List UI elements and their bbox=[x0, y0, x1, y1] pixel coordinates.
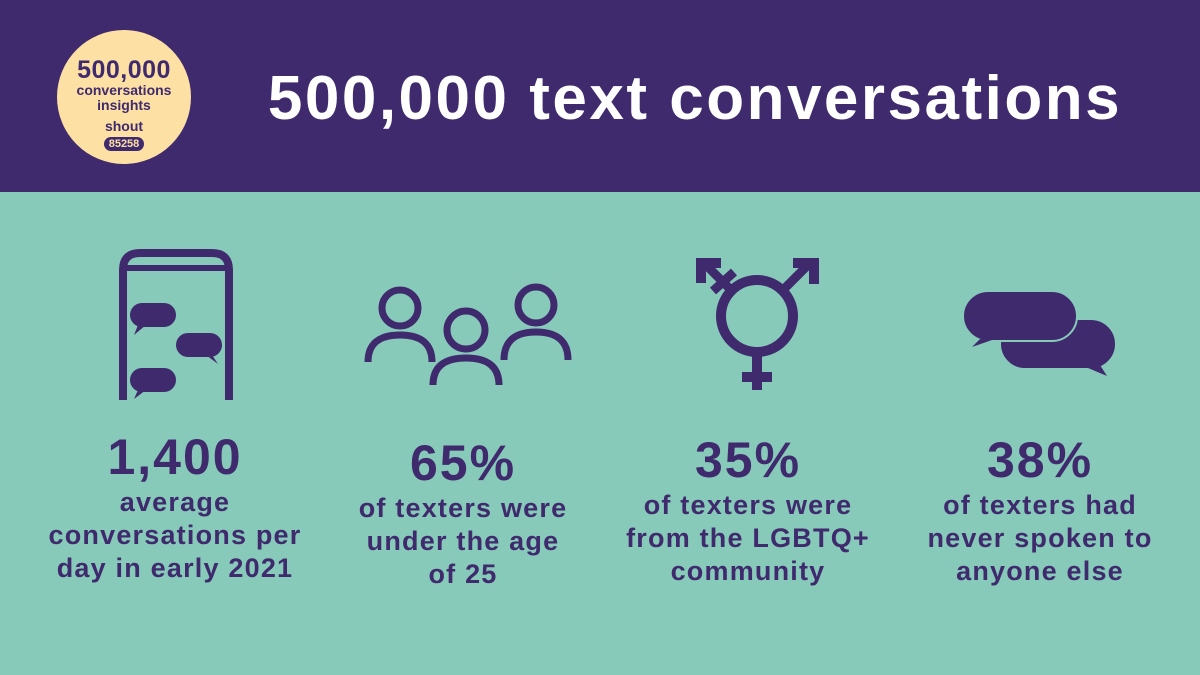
stat: LGBTQ+: from the LGBTQ+ bbox=[626, 523, 870, 553]
stat: under 25: of texters were bbox=[359, 493, 567, 523]
stat: never spoken bbox=[927, 432, 1153, 586]
icon: transgender symbol bbox=[696, 258, 819, 390]
stat: under 25: under the age bbox=[367, 526, 559, 556]
stat: under 25 bbox=[359, 435, 567, 589]
stat: never spoken: of texters had bbox=[943, 490, 1137, 520]
title: 500,000 text conversations bbox=[268, 64, 1122, 133]
stat: conversations per day bbox=[48, 429, 302, 583]
badge: shout logo: 85258 bbox=[109, 138, 139, 150]
header band bbox=[0, 0, 1200, 192]
icon: three people bbox=[364, 284, 572, 385]
badge: shout logo: 500,000 bbox=[77, 56, 171, 84]
stat: never spoken: never spoken to bbox=[927, 523, 1153, 553]
stat: LGBTQ+ bbox=[626, 432, 870, 586]
stat: conversations per day: average bbox=[120, 487, 230, 517]
icon: speech bubbles bbox=[964, 292, 1115, 376]
badge: shout logo bbox=[57, 30, 191, 164]
stat: conversations per day: 1,400 bbox=[107, 429, 243, 485]
stat: under 25: 65% bbox=[410, 435, 516, 491]
stat: never spoken: 38% bbox=[987, 432, 1093, 488]
stat: LGBTQ+: 35% bbox=[695, 432, 801, 488]
stat: conversations per day: day in early 2021 bbox=[57, 553, 293, 583]
stat: LGBTQ+: of texters were bbox=[644, 490, 852, 520]
badge: shout logo: insights bbox=[97, 97, 151, 113]
stat: never spoken: anyone else bbox=[956, 556, 1124, 586]
badge: shout logo: shout bbox=[105, 118, 143, 134]
stat: under 25: of 25 bbox=[428, 559, 498, 589]
stat: LGBTQ+: community bbox=[671, 556, 825, 586]
icon: phone with messages bbox=[119, 249, 233, 400]
stat: conversations per day: conversations per bbox=[48, 520, 302, 550]
badge: shout logo: conversations bbox=[77, 82, 171, 98]
